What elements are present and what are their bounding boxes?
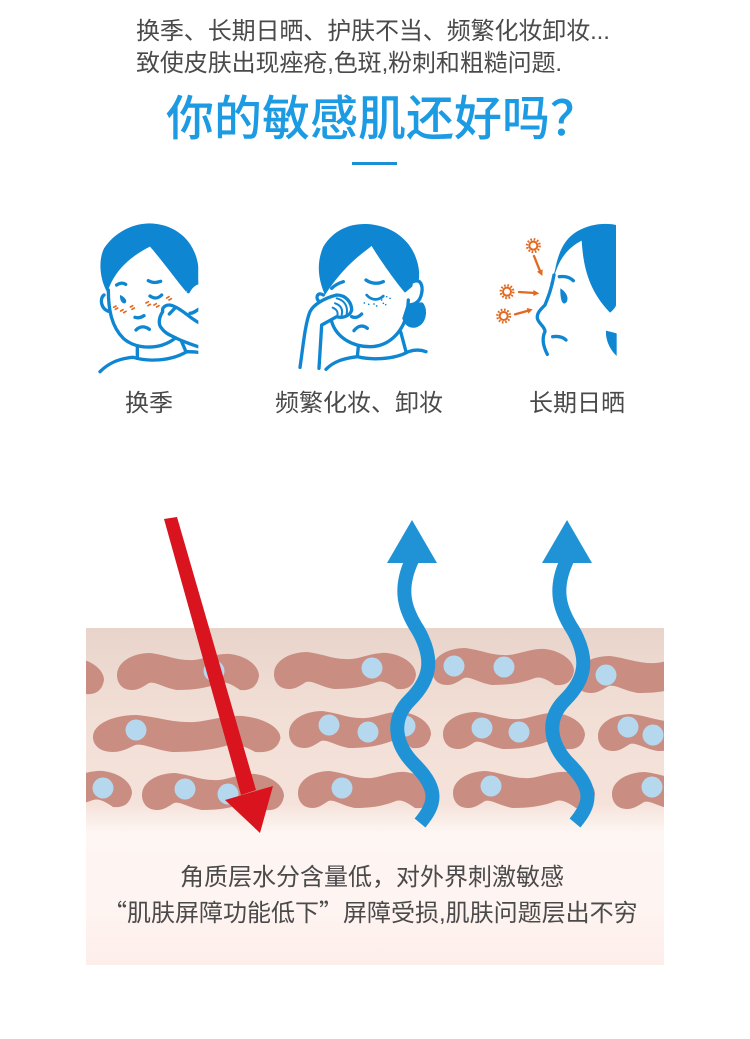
illustrations and skin diagram [86,223,664,965]
intro text [136,18,610,77]
panel: lower caption background [86,825,664,965]
panel: skin cross-section [86,628,664,833]
icon: profile exposed to sun [497,224,617,356]
icon: face with blemishes [100,223,200,372]
label: frequent makeup: 频繁化妆、卸妆 [275,390,443,417]
arrow: moisture escaping right [542,520,592,823]
skin cells [86,648,664,810]
arrow: red irritant going in [164,517,273,833]
title underline [352,162,397,165]
title: 你的敏感肌还好吗？ [166,93,598,146]
caption line 2: “肌肤屏障功能低下”屏障受损,肌肤问题层出不穷 [103,893,638,928]
water droplets [92,656,664,804]
label: sun exposure: 长期日晒 [529,390,625,417]
icon: face rubbing eye [300,224,426,369]
label: season change: 换季 [125,390,173,417]
intro text: 致使皮肤出现痤疮,色斑,粉刺和粗糙问题. [136,50,562,77]
arrow: moisture escaping left [387,520,437,823]
sun and arrow group [497,239,543,322]
caption line 1: 角质层水分含量低，对外界刺激敏感 [180,864,564,891]
intro text: 换季、长期日晒、护肤不当、频繁化妆卸妆... [136,18,610,45]
